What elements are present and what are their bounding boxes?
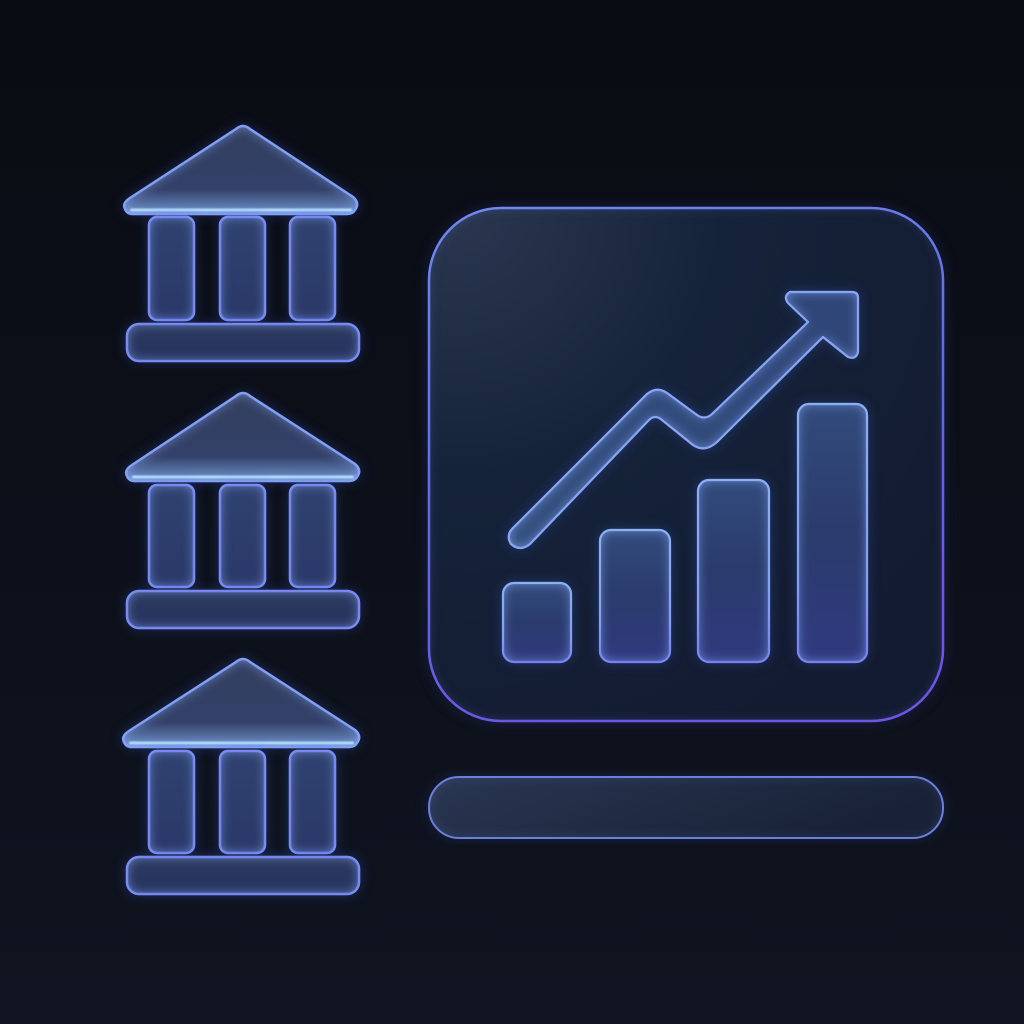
bar chart [503, 404, 867, 662]
bar 2 [600, 530, 670, 662]
bank 3 column left [149, 751, 194, 853]
arrow: upward trend line [509, 292, 858, 548]
bank 2 roof highlight [132, 476, 354, 478]
bank 1 roof [124, 126, 357, 214]
icon: bank building 1 [124, 126, 359, 361]
bar 3 [698, 480, 769, 662]
bar 1 [503, 583, 571, 662]
bank 2 column right [290, 485, 335, 587]
bar 4 [798, 404, 867, 662]
bank 2 column middle [220, 485, 265, 587]
bank 3 base [127, 857, 359, 894]
bank 3 roof highlight [129, 742, 354, 744]
panel background [429, 208, 943, 721]
bank 2 roof [126, 393, 359, 481]
bank 3 column right [290, 751, 335, 853]
bank 1 column right [290, 217, 335, 320]
bank 1 column left [149, 217, 194, 320]
icon: bank building 3 [123, 659, 359, 894]
bank 2 column left [149, 485, 194, 587]
bank 1 base [127, 324, 359, 361]
bank 3 roof [123, 659, 359, 747]
panel: growth chart [429, 208, 943, 721]
bank 2 base [127, 591, 359, 628]
bank 1 column middle [220, 217, 265, 320]
icon: bank building 2 [126, 393, 359, 628]
panel: long empty bar [429, 777, 943, 838]
bank 1 roof highlight [130, 208, 352, 212]
bank 3 column middle [220, 751, 265, 853]
